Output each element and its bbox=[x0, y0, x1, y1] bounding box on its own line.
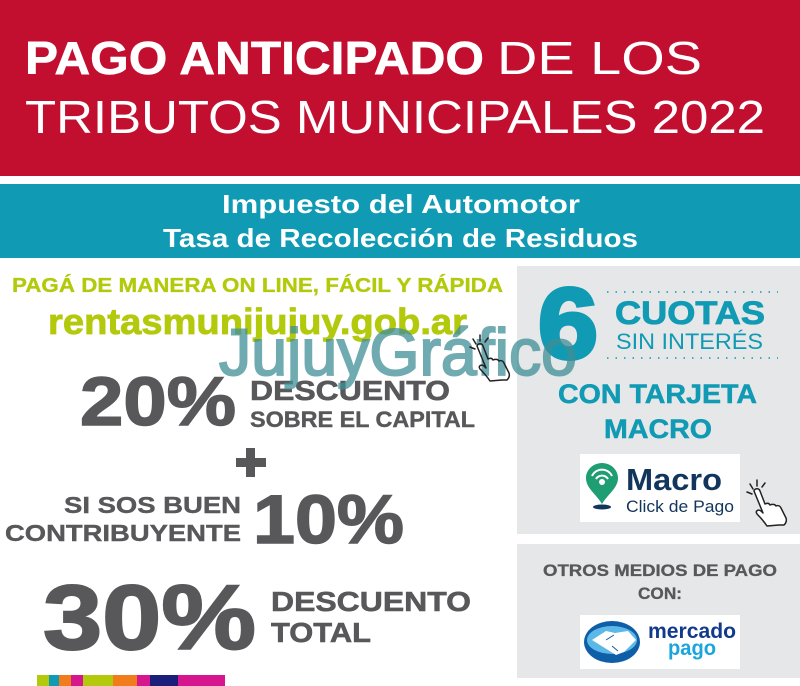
logo: mercado pago bbox=[580, 615, 740, 669]
logo: Macro Click de Pago: Macro bbox=[626, 462, 722, 497]
panel: discounts: SI SOS BUEN bbox=[64, 492, 241, 518]
panel: discounts bbox=[5, 363, 475, 669]
title: DE LOS bbox=[497, 32, 702, 84]
subtitle: Tasa de Recolección de Residuos bbox=[163, 223, 638, 253]
panel: cuotas: MACRO bbox=[604, 414, 712, 444]
panel: discounts: DESCUENTO bbox=[250, 375, 450, 406]
panel: discounts: 30% bbox=[43, 567, 256, 669]
logo: mercado pago: pago bbox=[668, 637, 716, 660]
panel: cuotas: CON TARJETA bbox=[558, 379, 757, 409]
title bbox=[25, 32, 765, 143]
subtitle bbox=[163, 189, 638, 253]
logo: municipal colour strip bbox=[37, 675, 225, 686]
panel: other payment methods: CON: bbox=[638, 584, 682, 603]
big number 6: 6 bbox=[538, 268, 598, 380]
panel: cuotas: CUOTAS bbox=[615, 295, 765, 331]
panel: cuotas: SIN INTERÉS bbox=[616, 329, 763, 354]
icon: hand pointer over link bbox=[470, 335, 509, 381]
title: TRIBUTOS MUNICIPALES 2022 bbox=[25, 91, 765, 143]
panel: teal subtitle band bbox=[0, 184, 800, 258]
panel: discounts: SOBRE EL CAPITAL bbox=[250, 407, 475, 432]
panel: cuotas bbox=[517, 266, 800, 534]
logo: mercado pago: mercado bbox=[648, 620, 736, 643]
icon: hand pointer bbox=[747, 480, 786, 526]
logo: Macro Click de Pago: Click de Pago bbox=[626, 497, 734, 516]
panel: online payment: PAGÁ DE MANERA ON LINE, FÁCIL Y RÁPIDA bbox=[12, 274, 503, 297]
panel: discounts: 20% bbox=[80, 363, 236, 440]
watermark: JujuyGráfico: JujuyGráfico bbox=[219, 315, 577, 389]
panel: other payment methods bbox=[517, 544, 800, 678]
panel: discounts: DESCUENTO bbox=[271, 586, 471, 617]
panel: other payment methods: OTROS MEDIOS DE PAGO bbox=[543, 561, 777, 580]
panel: online payment bbox=[12, 274, 503, 342]
panel: discounts: CONTRIBUYENTE bbox=[5, 520, 241, 546]
panel: red header bbox=[0, 0, 800, 176]
subtitle: Impuesto del Automotor bbox=[222, 189, 580, 219]
logo: Macro Click de Pago bbox=[580, 454, 740, 522]
panel: discounts: 10% bbox=[253, 481, 404, 558]
panel: online payment: rentasmunijujuy.gob.ar bbox=[48, 301, 467, 342]
panel: discounts: TOTAL bbox=[271, 617, 371, 648]
title: PAGO ANTICIPADO bbox=[25, 32, 484, 84]
